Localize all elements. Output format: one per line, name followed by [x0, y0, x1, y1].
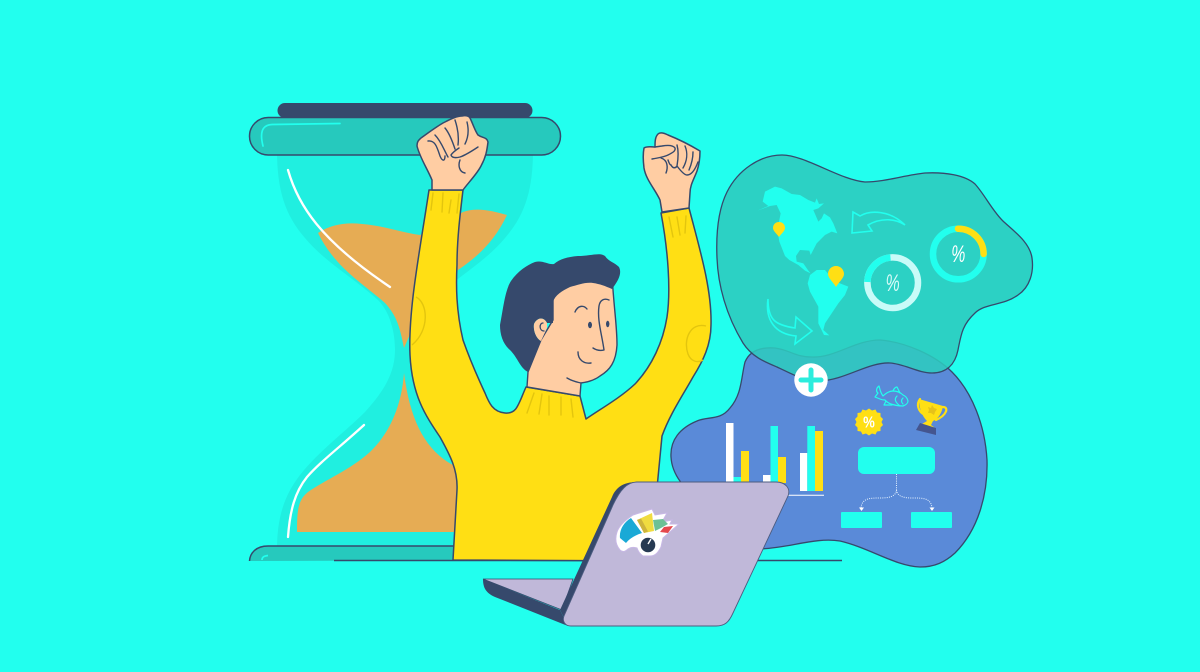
donut yellow — [933, 229, 984, 279]
top cap — [250, 118, 560, 155]
logo yellow wedge — [637, 513, 654, 533]
top bar — [278, 103, 532, 118]
hourglass glass — [277, 150, 533, 550]
logo pupil — [641, 538, 655, 552]
ear detail — [540, 323, 544, 331]
blue blob panel — [671, 340, 987, 567]
left eye — [588, 322, 592, 328]
smile — [578, 352, 591, 363]
logo sticker — [616, 509, 679, 556]
logo red wedge — [660, 526, 673, 533]
glass highlight top — [288, 170, 390, 287]
right fist — [643, 133, 700, 212]
neck and face — [527, 275, 617, 396]
map pin south — [828, 266, 844, 287]
bottom cap fill — [250, 546, 460, 561]
bottom cap highlight — [262, 556, 268, 560]
icon: fish — [875, 386, 908, 406]
left fist — [417, 116, 488, 190]
sweater knit marks — [431, 193, 686, 417]
donut white — [867, 257, 918, 308]
logo yellow wedge shadow — [637, 518, 648, 533]
top cap highlight — [262, 124, 340, 146]
world map — [757, 187, 848, 335]
North America — [757, 187, 837, 273]
top sand — [318, 210, 507, 348]
donut white: % — [886, 271, 900, 297]
donut yellow: % — [951, 242, 965, 268]
icon: percent badge: % — [863, 414, 875, 432]
icon: trophy — [916, 399, 946, 435]
icon: percent badge — [855, 408, 883, 436]
map pin north — [773, 222, 785, 237]
logo pupil needle — [648, 539, 651, 544]
table line — [334, 560, 842, 562]
plus circle — [794, 363, 828, 397]
jaw line — [567, 378, 581, 383]
glass highlight bottom — [288, 425, 364, 537]
logo green wedge — [653, 519, 668, 531]
hourglass — [250, 103, 560, 561]
laptop lid edge — [560, 482, 650, 626]
laptop — [483, 482, 789, 626]
hair — [500, 254, 620, 372]
elbow creases — [412, 297, 706, 362]
arrow bottom — [767, 299, 812, 344]
logo blue wedge — [620, 518, 642, 543]
South America — [808, 270, 848, 335]
teal blob panel — [717, 155, 1032, 381]
nose — [593, 299, 609, 350]
sweater — [410, 190, 711, 561]
bottom sand — [297, 373, 470, 532]
laptop lid — [563, 482, 789, 626]
teal blob shape — [717, 155, 1032, 381]
laptop underside — [483, 579, 568, 626]
person — [410, 116, 711, 561]
blue blob shape — [671, 340, 987, 567]
sticker backing — [616, 509, 679, 556]
laptop base — [483, 579, 573, 610]
bottom cap outline — [250, 546, 460, 561]
arrow top — [852, 212, 905, 233]
head — [500, 254, 620, 396]
ear — [534, 319, 547, 341]
bar chart — [726, 423, 824, 495]
right eye — [606, 321, 609, 327]
org chart — [841, 447, 952, 528]
eyebrow — [575, 306, 587, 312]
